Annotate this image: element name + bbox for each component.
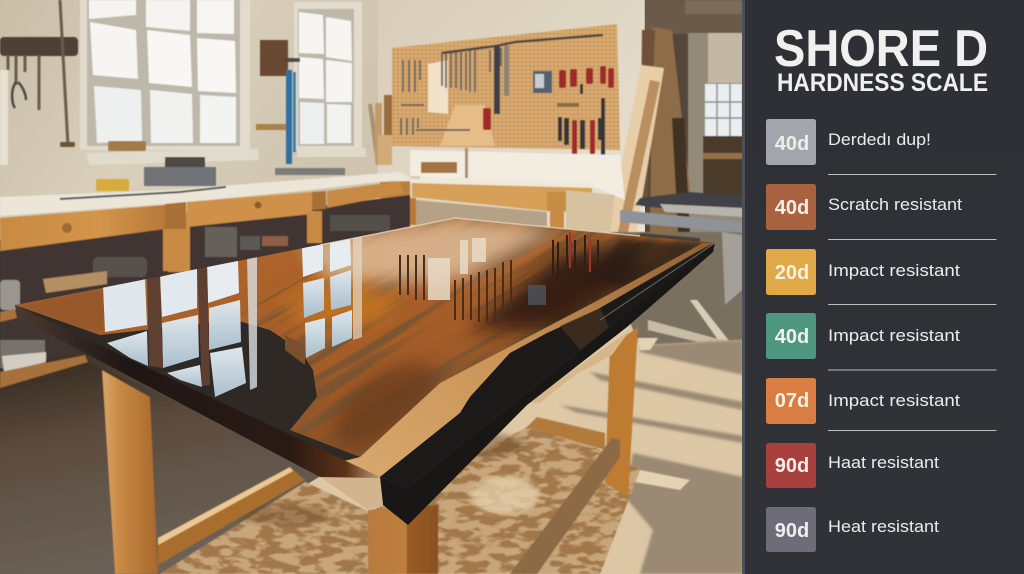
title [774,20,988,97]
table top [15,217,715,525]
row: 20d yellow: 20d [775,262,809,284]
panel: hardness scale [742,0,1024,574]
edge highlight [600,243,715,320]
row: 40d green: Impact resistant [828,326,960,345]
title: HARDNESS SCALE [777,69,988,97]
left wood reflection [19,288,106,335]
reflected wall light [428,238,486,300]
upper pale reflection [300,218,560,285]
right bench [380,148,596,229]
reflection in black channel [560,308,610,350]
reflected window frames [147,263,210,386]
left edge window trim [0,70,8,165]
left lower shelf board [0,355,88,388]
front left leg [102,370,158,574]
row: 40d green [766,313,960,359]
row: 07d orange: 07d [775,390,809,412]
workshop background [0,0,743,574]
left stretcher [158,467,305,565]
reflected windows [103,233,362,397]
doorway and back room [645,0,743,233]
left edge face [15,305,383,505]
pale underside wedge [527,330,630,403]
front centre leg [368,505,438,574]
sawdust field [160,420,640,574]
wall tool rack [0,0,78,147]
row: 40d grey: Derdedı dup! [828,130,931,149]
window left [80,0,250,150]
row: 40d brown: 40d [775,197,809,219]
row: 40d grey: 40d [775,133,809,155]
front right stretcher [510,438,620,574]
floor shadow bands [560,340,743,574]
dark reflection band [470,245,640,330]
row: 40d brown [766,184,962,230]
row: 90d slate: Heat resistant [828,517,939,536]
stacked wood offcuts [368,95,392,165]
row: 07d orange: Impact resistant [828,391,960,410]
saw table [620,192,743,368]
row: 40d green: 40d [775,326,809,348]
black front edge [380,243,715,525]
shelf items under bench [0,212,390,372]
yellow block [96,179,129,191]
underbench shelf shadow [0,195,410,372]
wall clamp and blue bar [256,40,300,164]
sill items [108,141,146,151]
window sill left [86,149,259,165]
saw on bench [60,187,226,199]
sun patches on floor [635,338,690,490]
orange glow [285,281,395,329]
pegboard [392,24,620,160]
reflected tools [400,232,598,322]
row: 90d red [766,443,939,488]
reflected sill [285,335,305,365]
area under saw table [610,232,743,345]
title: SHORE D [774,20,988,78]
black resin channel [380,243,715,500]
sapwood strip [340,243,712,477]
walnut lower tone [328,356,438,451]
left small shelf board [0,309,17,322]
row: 40d grey [766,119,931,165]
panel background [745,0,1024,574]
row: 40d brown: Scratch resistant [828,195,962,214]
table legs and stretchers [102,327,638,574]
row: 90d slate [766,507,939,552]
dark resin base [15,218,715,488]
wood slab [16,218,714,457]
far right dark [590,240,715,290]
base backdrop [0,0,743,574]
leaning lumber boards [608,27,690,235]
row: 90d red: Haat resistant [828,453,939,472]
panel edge [742,0,746,574]
left bench [0,157,412,271]
row: 90d red: 90d [775,455,809,477]
hanging tools [401,45,506,135]
right rear leg [605,327,638,497]
window right [294,2,362,150]
back wall below right bench [566,190,615,232]
left floor over shelf shadow [0,362,330,574]
window sill right [297,148,366,157]
grey bin [144,167,216,186]
reflected blue box [528,285,546,305]
row: 20d yellow: Impact resistant [828,261,960,280]
glossy surface [15,218,714,487]
back stretcher right [527,417,605,450]
row: 07d orange [766,378,960,424]
row: 20d yellow [766,249,960,295]
lit wall under pegboard [410,150,625,200]
row: 90d slate: 90d [775,520,809,542]
photo: epoxy river table in a sunlit workshop [0,0,743,574]
pale corner underside [320,477,383,510]
back rim highlight [320,218,640,245]
